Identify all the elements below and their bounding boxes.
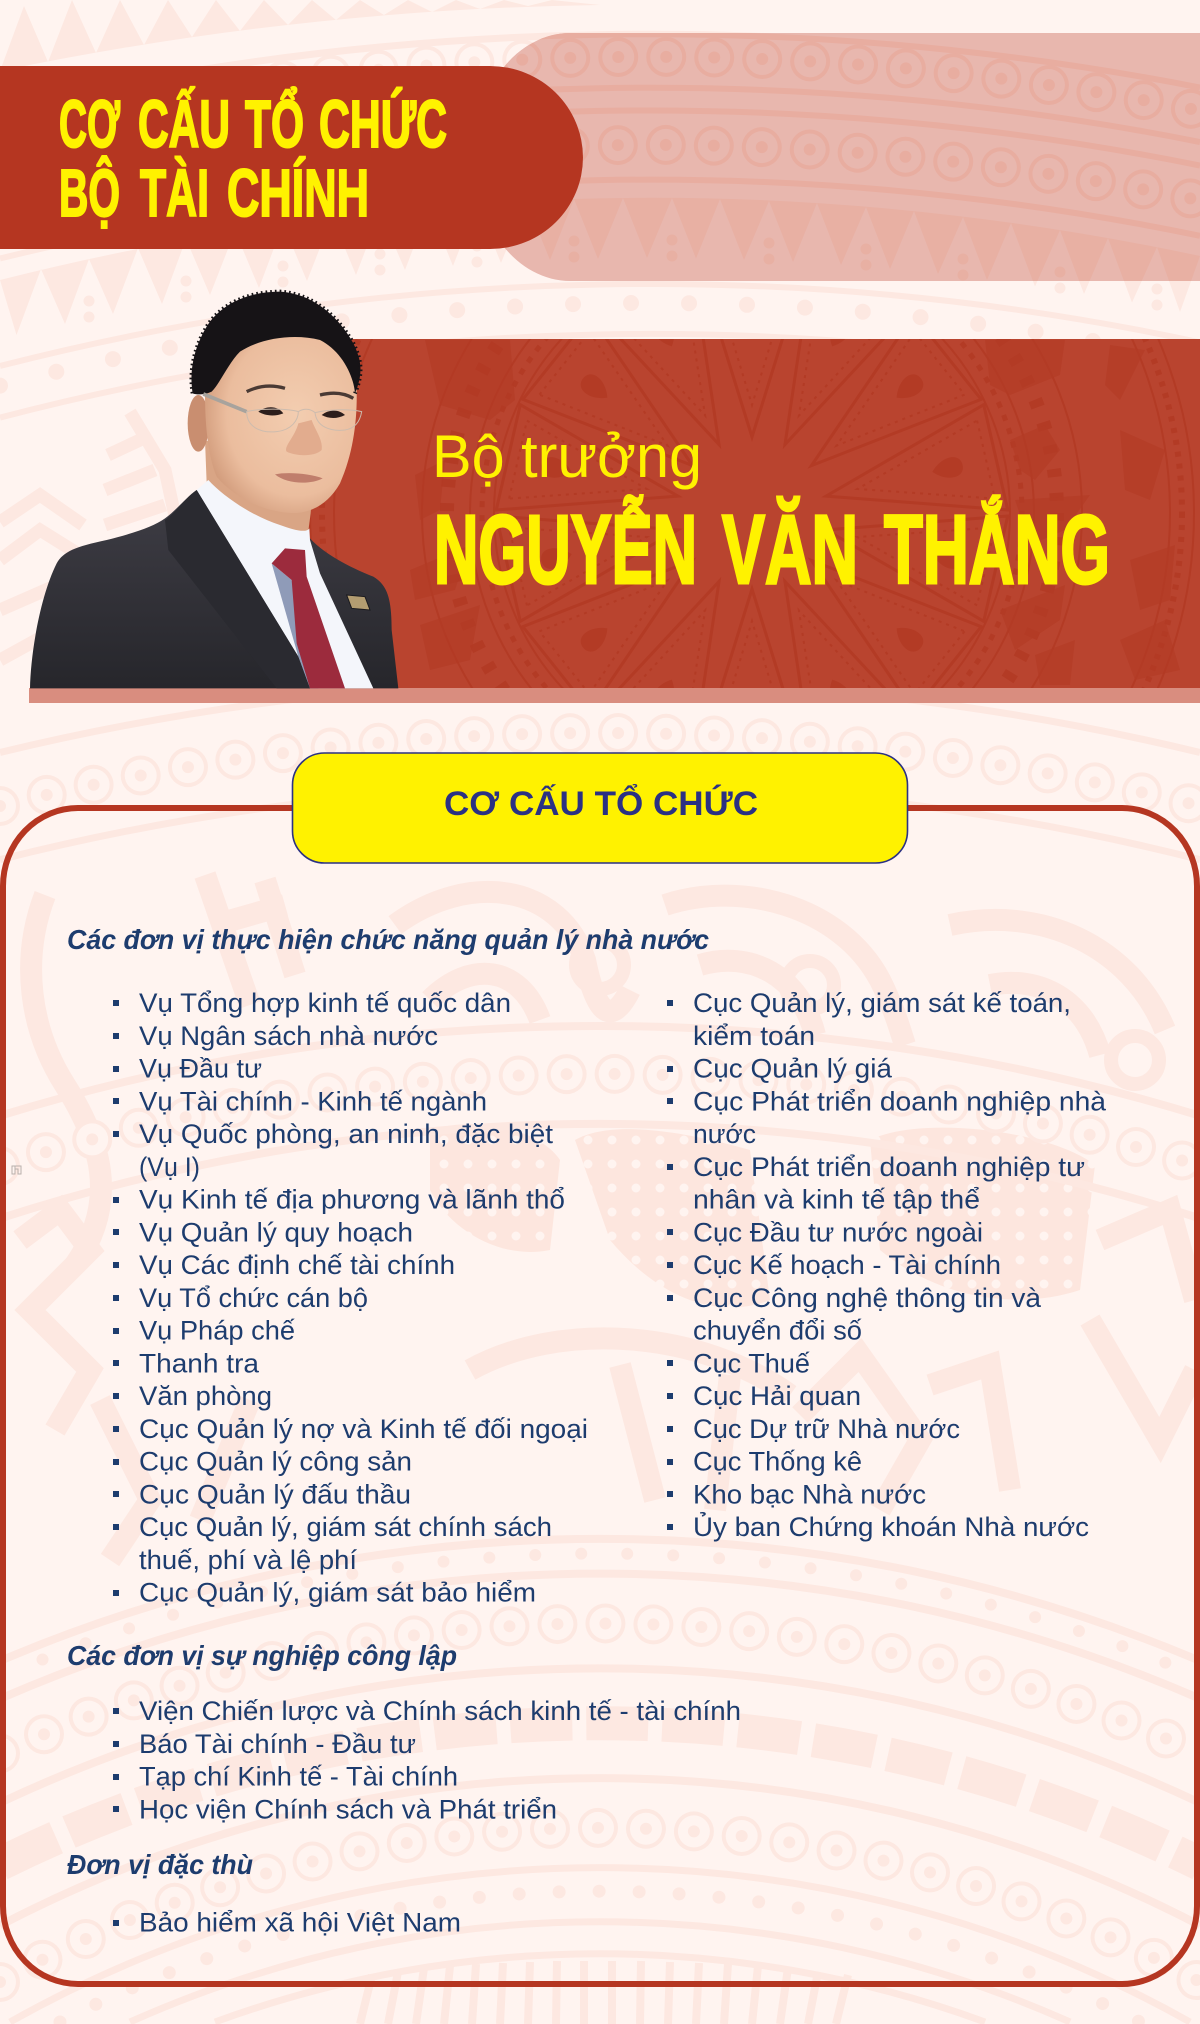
minister name: VĂN xyxy=(722,495,858,604)
triangle band dots xyxy=(89,240,1157,317)
list: public service units: Học viện Chính sách và Phát triển xyxy=(139,1794,557,1824)
list: right column: Cục Phát triển doanh nghiệp tư xyxy=(693,1152,1085,1182)
list: left column: (Vụ I) xyxy=(139,1152,200,1182)
dotted motif blocks xyxy=(430,1124,1095,1308)
glasses xyxy=(203,394,362,432)
list: left column: Vụ Kinh tế địa phương và lãnh thổ xyxy=(139,1184,565,1214)
lapel xyxy=(165,490,310,688)
title text: CHÍNH xyxy=(227,156,369,231)
list: right column: Cục Quản lý, giám sát kế toán, xyxy=(693,988,1071,1018)
minister name: NGUYỄN xyxy=(434,495,697,604)
list: left column: Vụ Quốc phòng, an ninh, đặc biệt xyxy=(139,1119,554,1149)
left hand motif xyxy=(0,412,178,660)
neck xyxy=(205,440,313,543)
nose xyxy=(286,420,322,455)
eyes xyxy=(258,407,345,418)
ear xyxy=(188,395,209,452)
bird eye rings xyxy=(576,941,1159,1084)
hair xyxy=(191,292,360,394)
list: left column: Cục Quản lý, giám sát bảo hiểm xyxy=(139,1578,536,1608)
suit xyxy=(30,490,398,688)
yellow section title box xyxy=(292,753,908,863)
list: right column: Kho bạc Nhà nước xyxy=(693,1479,926,1509)
banner animal motifs xyxy=(410,340,1180,685)
drum motif xyxy=(310,339,1195,688)
list: right column: Cục Quản lý giá xyxy=(693,1054,893,1084)
title text: TỔ xyxy=(245,87,304,162)
minister banner xyxy=(308,339,1200,688)
list: left column: Vụ Các định chế tài chính xyxy=(139,1250,455,1280)
list: left column: Vụ Đầu tư xyxy=(139,1054,262,1084)
list: left column: Cục Quản lý, giám sát chính sách xyxy=(139,1512,552,1542)
list: public service units: Tạp chí Kinh tế - Tài chính xyxy=(139,1762,458,1792)
top triangle band xyxy=(0,0,600,71)
list: right column: Cục Thuế xyxy=(693,1348,810,1378)
list: left column: Cục Quản lý đấu thầu xyxy=(139,1479,411,1509)
list: right column: chuyển đổi số xyxy=(693,1316,862,1346)
list: left column: Vụ Quản lý quy hoạch xyxy=(139,1217,413,1247)
banner strip xyxy=(29,688,1200,703)
decorative pink pill xyxy=(504,33,1200,281)
bird motifs xyxy=(20,875,1195,1560)
title text xyxy=(59,87,447,231)
title text: CHỨC xyxy=(319,87,447,162)
shirt shadow xyxy=(272,563,318,688)
title text: BỘ xyxy=(59,156,120,231)
mouth xyxy=(275,473,323,483)
list: left column: Vụ Tổng hợp kinh tế quốc dân xyxy=(139,988,511,1018)
title pill xyxy=(0,66,583,249)
middle drum arcs xyxy=(0,681,1200,860)
list: left column: Vụ Pháp chế xyxy=(139,1316,295,1346)
tie xyxy=(272,548,345,688)
panel: organisational structure frame xyxy=(3,808,1197,1984)
heading: first section: Các đơn vị thực hiện chức năng quản lý nhà nước xyxy=(67,924,709,955)
shirt xyxy=(197,480,373,688)
lapel pin xyxy=(347,595,370,610)
list: left column xyxy=(113,988,588,1608)
list: left column: Thanh tra xyxy=(139,1348,260,1378)
heading: third section: Đơn vị đặc thù xyxy=(67,1849,253,1880)
lower drum arcs xyxy=(0,1026,1200,2024)
list: left column: thuế, phí và lệ phí xyxy=(139,1545,358,1575)
list: right column: Cục Phát triển doanh nghiệp nhà xyxy=(693,1086,1107,1116)
list: right column: nước xyxy=(693,1119,756,1149)
list: right column: kiểm toán xyxy=(693,1021,815,1051)
upper triangle band xyxy=(0,198,1200,335)
list: public service units: Báo Tài chính - Đầu tư xyxy=(139,1729,416,1759)
title text: CƠ xyxy=(59,87,120,162)
pill pattern xyxy=(504,33,1200,281)
minister name xyxy=(434,495,1110,604)
list: left column: Cục Quản lý công sản xyxy=(139,1446,412,1476)
list: right column: Ủy ban Chứng khoán Nhà nước xyxy=(693,1510,1089,1542)
list: right column: nhân và kinh tế tập thể xyxy=(693,1184,980,1214)
list: right column xyxy=(667,988,1107,1542)
list: left column: Cục Quản lý nợ và Kinh tế đối ngoại xyxy=(139,1414,588,1444)
section title text: CƠ CẤU TỔ CHỨC xyxy=(444,785,758,823)
list: right column: Cục Thống kê xyxy=(693,1446,862,1476)
list: left column: Văn phòng xyxy=(139,1381,272,1411)
list: right column: Cục Công nghệ thông tin và xyxy=(693,1283,1042,1313)
list: public service units xyxy=(113,1696,741,1824)
list: right column: Cục Đầu tư nước ngoài xyxy=(693,1217,983,1247)
list: special unit: Bảo hiểm xã hội Việt Nam xyxy=(139,1908,461,1938)
list: left column: Vụ Ngân sách nhà nước xyxy=(139,1021,438,1051)
list: public service units: Viện Chiến lược và Chính sách kinh tế - tài chính xyxy=(139,1696,741,1726)
portrait of the minister xyxy=(30,292,398,688)
minister role: Bộ trưởng xyxy=(432,423,702,490)
list: right column: Cục Hải quan xyxy=(693,1381,861,1411)
face xyxy=(205,333,357,513)
title text: TÀI xyxy=(140,156,209,231)
upper drum arcs xyxy=(0,34,1200,418)
list: right column: Cục Dự trữ Nhà nước xyxy=(693,1414,960,1444)
title text: CẤU xyxy=(138,87,230,162)
list: left column: Vụ Tài chính - Kinh tế ngành xyxy=(139,1086,487,1116)
heading: second section: Các đơn vị sự nghiệp công lập xyxy=(67,1640,457,1671)
list: right column: Cục Kế hoạch - Tài chính xyxy=(693,1250,1001,1280)
eyebrows xyxy=(247,386,353,398)
list: left column: Vụ Tổ chức cán bộ xyxy=(139,1283,368,1313)
